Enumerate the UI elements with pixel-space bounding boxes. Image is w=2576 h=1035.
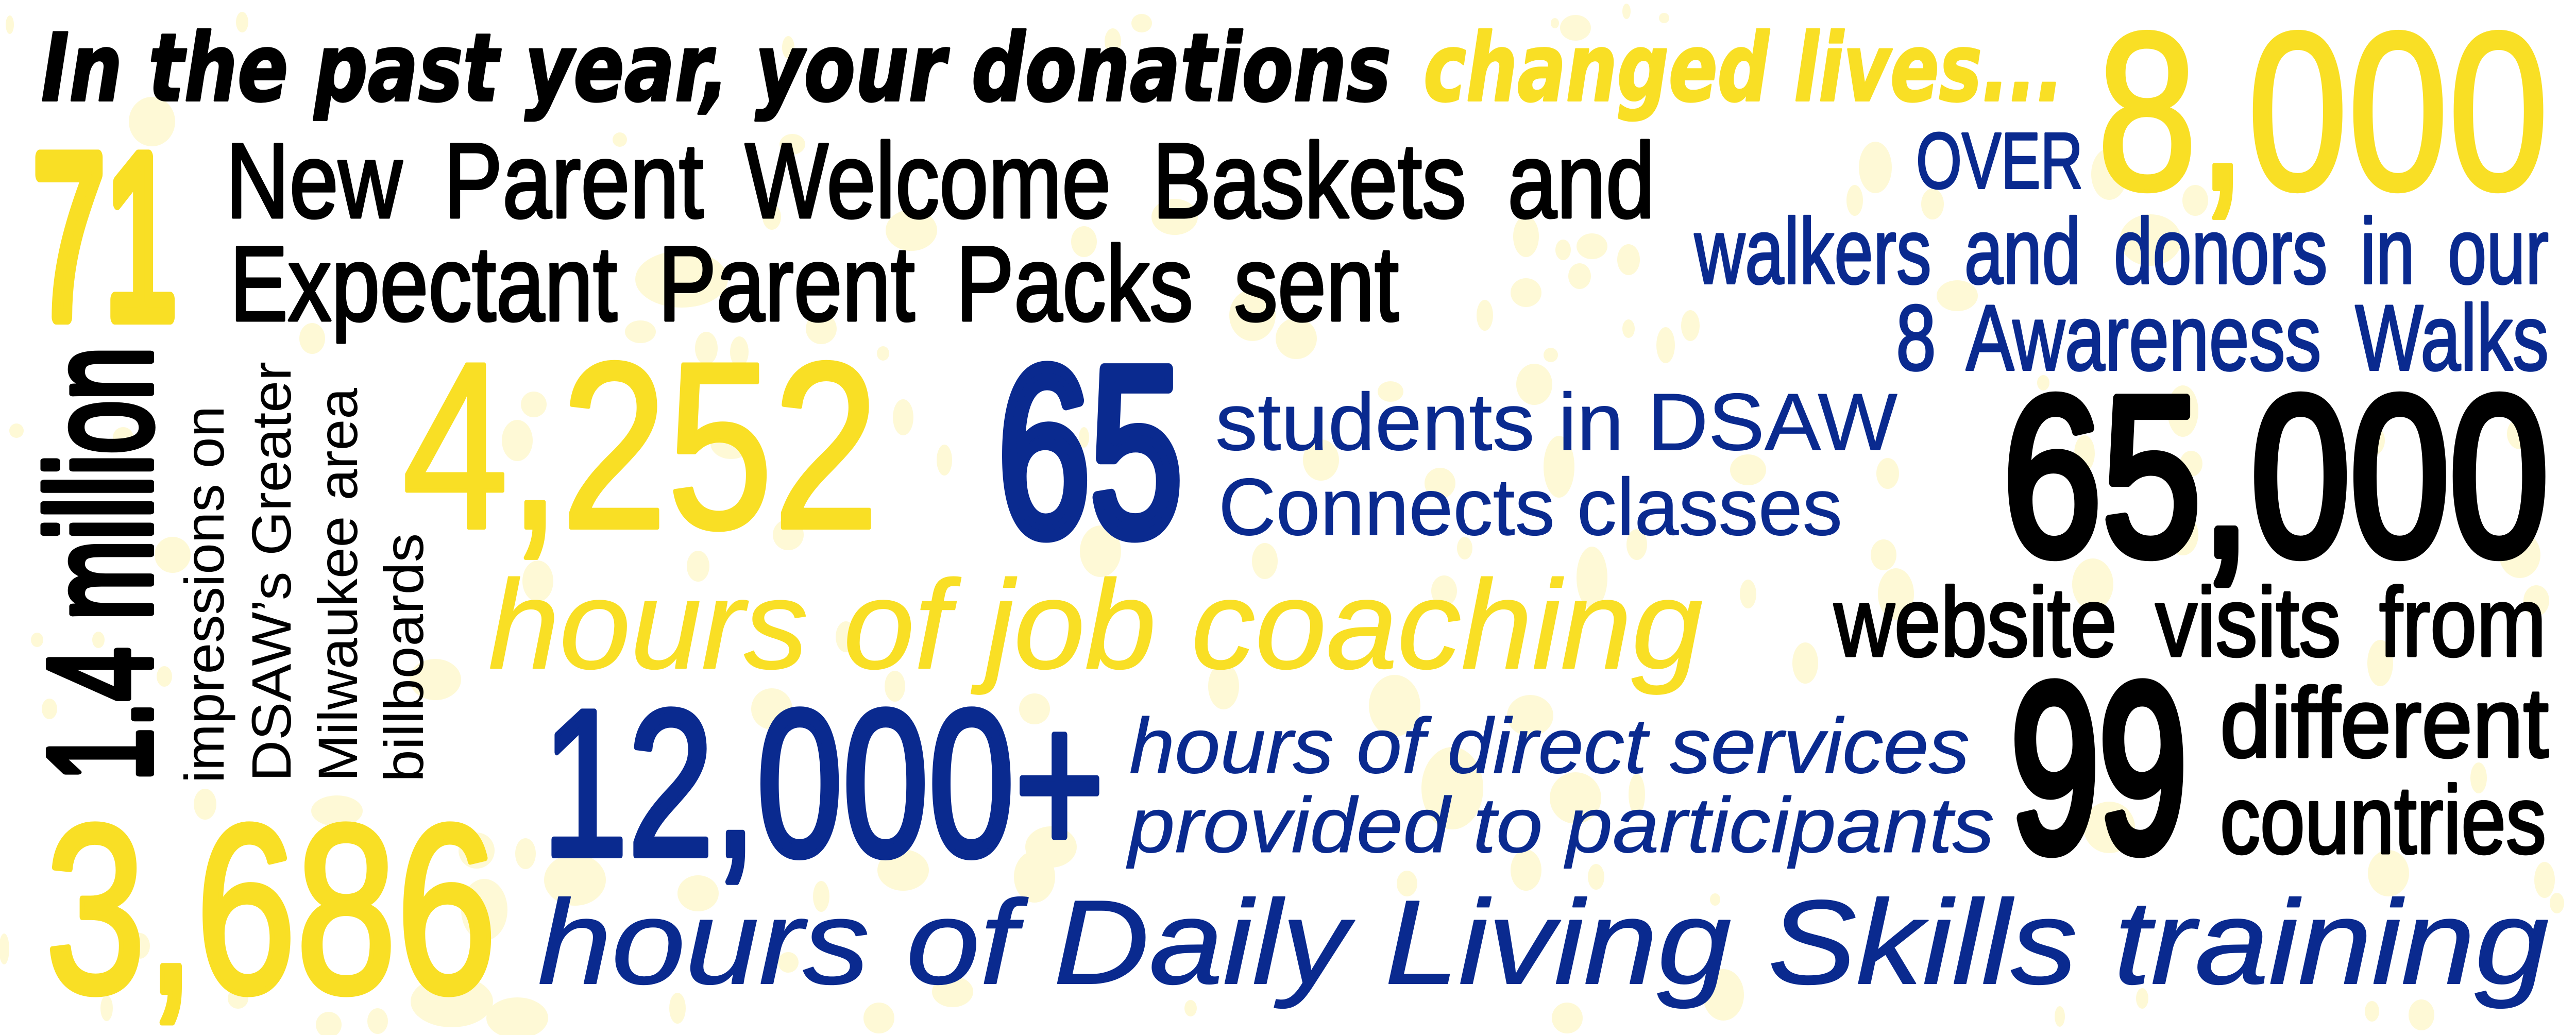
label line 2: Connects classes [1218, 462, 1842, 552]
label: hours of job coaching [488, 554, 1703, 695]
stat: 65,000 website visits [1834, 350, 2549, 677]
number: 3,686: 3,686 [45, 775, 497, 1035]
title: black part: In the past year, your donations [41, 13, 1391, 123]
label line 1: New Parent Welcome Baskets and [226, 121, 1655, 240]
title [41, 13, 2064, 123]
label line 2: provided to participants [1126, 782, 1994, 869]
label: billboards [372, 533, 435, 782]
stat: 65 students [998, 317, 1897, 585]
title: yellow part: changed lives... [1423, 13, 2064, 123]
stat: 71 welcome baskets [33, 108, 1655, 366]
stat: 4,252 hours of job coaching [402, 314, 1703, 695]
label: DSAW’s Greater [240, 362, 302, 782]
label line 1: students in DSAW [1215, 377, 1897, 467]
stat: 99 countries [2011, 635, 2549, 901]
over label: OVER [1916, 116, 2083, 205]
stat: 3,686 daily living skills hours [45, 775, 2549, 1035]
stat: 8,000 walkers [1694, 0, 2549, 390]
number: 12,000+: 12,000+ [542, 666, 1105, 900]
label line 2: Expectant Parent Packs sent [230, 224, 1399, 343]
number: 99: 99 [2011, 635, 2187, 901]
label: Milwaukee area [307, 387, 369, 782]
stat: 1.4 million impressions [18, 347, 435, 783]
label [173, 362, 435, 783]
label line 1: hours of direct services [1129, 702, 1970, 790]
label line 1: different [2220, 667, 2549, 778]
number: 4,252: 4,252 [402, 314, 879, 578]
label: impressions on [173, 406, 235, 783]
stat: 12,000+ direct service hours [542, 666, 1994, 900]
label: hours of Daily Living Skills training [538, 876, 2549, 1009]
number: 71: 71 [33, 108, 177, 366]
number: 1.4 million: 1.4 million [18, 347, 182, 782]
number: 65: 65 [998, 317, 1182, 585]
